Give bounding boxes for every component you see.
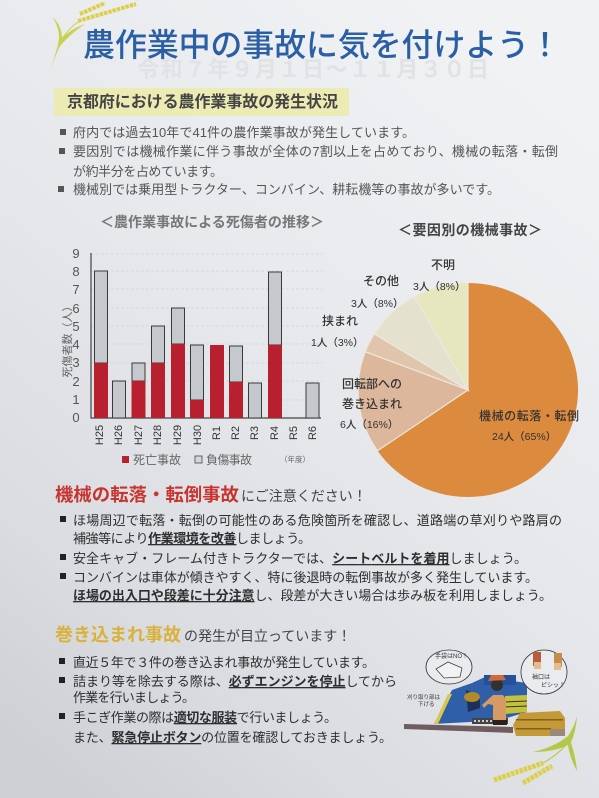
x axis labels: R5 — [288, 426, 300, 440]
speech bubble: gloves — [426, 650, 472, 684]
x axis labels: R4 — [269, 426, 281, 440]
speech bubble: sleeves — [521, 650, 567, 694]
speech bubble: sleeves: ピシッ！ — [541, 682, 565, 689]
text block: overturn bullets — [60, 513, 562, 603]
text block: overview bullets: 要因別では機械作業に伴う事故が全体の7割以上を占めており、機械の転落・転倒 — [73, 144, 558, 159]
text block: overturn bullets: ほ場の出入口や段差に十分注意し、段差が大きい場合は歩み板を利用しましょう。 — [73, 588, 552, 603]
combine body — [434, 675, 527, 724]
pie labels: その他 — [363, 274, 399, 288]
y axis labels: 2 — [72, 374, 80, 389]
y axis labels: 1 — [72, 392, 80, 407]
text block: entanglement bullets — [59, 655, 397, 745]
pie labels: 巻き込まれ — [342, 396, 402, 411]
legend: 負傷事故 — [206, 452, 252, 467]
y axis labels: 9 — [72, 246, 80, 261]
text block: entanglement bullets: 手こぎ作業の際は適切な服装で行いましょう。 — [73, 710, 337, 725]
text block: entanglement bullets: また、緊急停止ボタンの位置を確認しておきましょう。 — [73, 730, 392, 745]
y axis title: 死傷者数（人） — [60, 300, 74, 378]
pie labels: 機械の転落・転倒 — [479, 408, 579, 423]
panel: pie chart by cause — [311, 222, 579, 497]
y axis labels — [72, 246, 80, 425]
pie labels: 挟まれ — [322, 314, 358, 328]
heading: status in Kyoto — [54, 88, 349, 116]
text block: entanglement bullets: 直近５年で３件の巻き込まれ事故が発生しています。 — [73, 655, 375, 670]
text block: overview bullets: 府内では過去10年で41件の農作業事故が発生しています。 — [73, 125, 415, 140]
y axis labels: 5 — [72, 319, 80, 334]
pie labels: 6人（16%） — [340, 418, 398, 431]
y axis labels: 4 — [72, 337, 80, 352]
illustration: combine harvester and worker — [404, 650, 567, 736]
x axis labels: H29 — [172, 425, 184, 445]
x axis labels: R6 — [307, 426, 319, 440]
legend — [122, 452, 310, 467]
text block: entanglement bullets: 詰まり等を除去する際は、必ずエンジンを停止してから — [73, 674, 397, 689]
speech bubble: gloves: 手袋はNO！ — [435, 652, 468, 660]
pie labels: 不明 — [431, 258, 455, 272]
x axis labels: R2 — [230, 426, 242, 440]
panel: entanglement accidents — [55, 625, 397, 745]
legend: 死亡事故 — [133, 452, 181, 467]
icon: rice ear bottom right — [494, 716, 577, 783]
text block: entanglement bullets: 作業を行いましょう。 — [73, 690, 195, 705]
pie slices — [358, 283, 578, 497]
heading: entanglement accidents: 巻き込まれ事故 — [55, 625, 181, 645]
y axis labels: 0 — [72, 410, 80, 425]
caption: lower the header: 下げる — [418, 700, 435, 708]
y axis labels: 7 — [72, 282, 80, 297]
text: 令和７年９月１日～１１月３０日 — [137, 57, 489, 82]
heading: status in Kyoto: 京都府における農作業事故の発生状況 — [67, 92, 338, 111]
x axis labels: R3 — [249, 426, 261, 440]
caption: lower the header: 刈り取り部は — [407, 693, 441, 701]
pie labels: 3人（8%） — [413, 280, 466, 293]
ground — [404, 724, 513, 733]
text block: overturn bullets: コンバインは車体が傾きやすく、特に後退時の転倒事故が多く発生しています。 — [73, 570, 538, 585]
chart title: casualties trend: ＜農作業事故による死傷者の推移＞ — [100, 214, 324, 230]
hay bales — [513, 711, 565, 736]
panel: bar chart of casualties — [60, 214, 324, 467]
pie labels: 回転部への — [342, 376, 402, 391]
pie labels: 3人（8%） — [351, 297, 404, 310]
x axis labels: H28 — [152, 425, 164, 445]
text block: overturn bullets: 補強等により作業環境を改善しましょう。 — [73, 531, 311, 546]
x axis labels: H25 — [94, 425, 106, 445]
pie labels: 1人（3%） — [311, 336, 364, 349]
text block: overturn bullets: ほ場周辺で転落・転倒の可能性のある危険箇所を確認し、道路端の草刈りや路肩の — [73, 513, 562, 528]
text block: overview bullets — [58, 125, 558, 197]
pie labels: 24人（65%） — [492, 430, 556, 443]
x axis labels: H26 — [113, 425, 125, 445]
y axis labels: 6 — [72, 301, 80, 316]
y axis labels: 8 — [72, 264, 80, 279]
legend: （年度） — [280, 454, 310, 464]
worker — [482, 675, 507, 725]
heading: overturn accidents: にご注意ください！ — [241, 488, 367, 504]
y axis labels: 3 — [72, 355, 80, 370]
x axis labels: R1 — [211, 426, 223, 440]
title: 農作業中の事故に気を付けよう！ — [83, 27, 561, 63]
speech bubble: sleeves: 袖口は — [532, 673, 550, 681]
x axis labels: H30 — [192, 425, 204, 445]
text block: overview bullets: 機械別では乗用型トラクター、コンバイン、耕耘機等の事故が多いです。 — [73, 182, 500, 197]
bars: injuries — [94, 271, 319, 418]
panel: machine overturn accidents — [55, 484, 562, 603]
pie labels — [311, 258, 579, 443]
text block: overturn bullets: 安全キャブ・フレーム付きトラクターでは、シートベルトを着用しましょう。 — [73, 551, 527, 566]
bar chart grid and axes — [91, 253, 323, 418]
x axis labels: H27 — [133, 425, 145, 445]
heading: overturn accidents: 機械の転落・転倒事故 — [55, 484, 240, 505]
bars: fatalities — [94, 344, 282, 418]
chart title: machine accidents by cause: ＜要因別の機械事故＞ — [398, 222, 542, 238]
caption: lower the header — [407, 693, 441, 708]
x axis labels — [94, 425, 319, 445]
text block: overview bullets: が約半分を占めています。 — [73, 164, 223, 179]
heading: entanglement accidents: の発生が目立っています！ — [184, 628, 351, 644]
icon: rice ear top left — [50, 3, 136, 75]
